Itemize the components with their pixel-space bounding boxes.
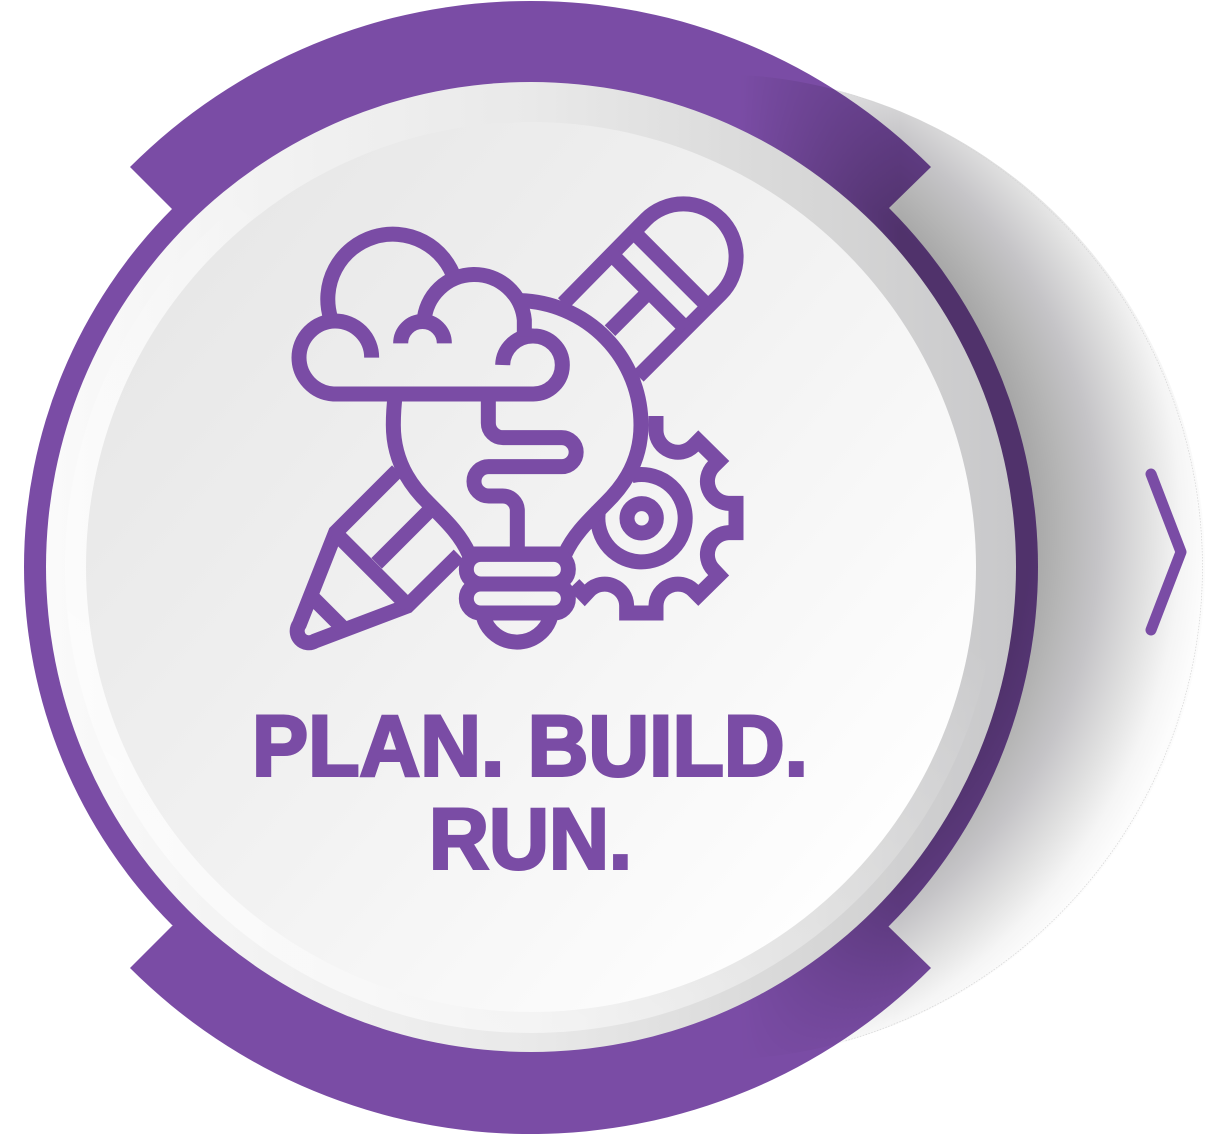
title line 1: PLAN. BUILD.	[252, 698, 808, 794]
white disc	[46, 82, 1016, 1052]
icon: lower pencil	[297, 471, 459, 643]
bottom thick arc	[130, 830, 931, 1134]
title	[252, 698, 808, 888]
icon: light bulb	[393, 301, 641, 642]
icon: gear	[574, 416, 736, 613]
title line 2: RUN.	[429, 792, 632, 888]
thin ring	[24, 60, 1038, 1074]
shadow edge	[845, 93, 1202, 1041]
top thick arc	[130, 1, 931, 300]
arrow: chevron	[1151, 474, 1181, 630]
inner rim band	[65, 101, 997, 1033]
disc face	[86, 122, 976, 1012]
drop shadow	[763, 78, 1188, 1040]
icon: bulb, cloud, pencil and gear	[297, 204, 736, 643]
icon: upper pencil	[563, 204, 736, 376]
disc rim	[46, 82, 1016, 1052]
icon: cloud	[299, 234, 562, 394]
